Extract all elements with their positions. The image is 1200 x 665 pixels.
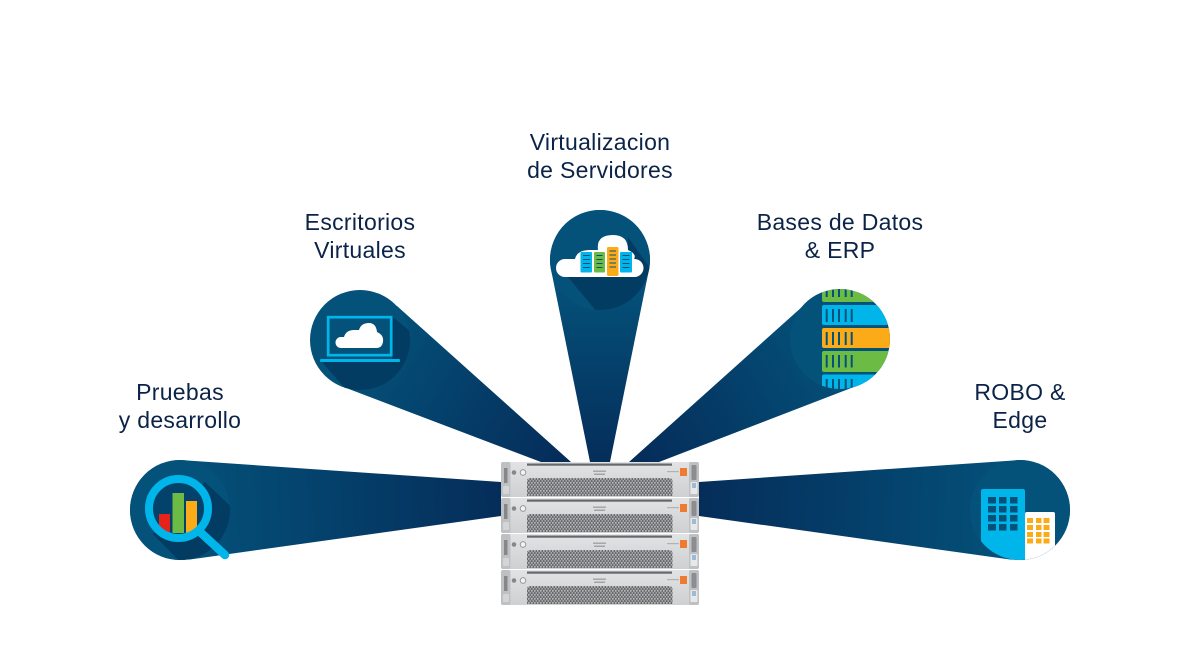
label: Bases de Datos y ERP: Bases de Datos <box>757 209 923 235</box>
beam: ROBO y Edge <box>699 460 1070 560</box>
beam: Bases de Datos y ERP <box>629 303 871 462</box>
label: Escritorios Virtuales: Escritorios <box>305 209 415 235</box>
label: Bases de Datos y ERP: & ERP <box>805 237 875 263</box>
server unit 3 <box>501 534 699 569</box>
label: ROBO y Edge: Edge <box>993 407 1047 433</box>
server unit 2 <box>501 498 699 533</box>
label: ROBO y Edge: ROBO & <box>974 379 1066 405</box>
label: Pruebas y desarrollo: y desarrollo <box>119 407 241 433</box>
icon: office buildings <box>981 460 1070 560</box>
label: Pruebas y desarrollo: Pruebas <box>136 379 224 405</box>
icon: magnifying glass with bar chart <box>130 460 230 560</box>
beam: Escritorios Virtuales <box>328 302 571 462</box>
icon: database server stack <box>800 289 890 389</box>
server unit 1 <box>501 462 699 497</box>
beam: Virtualizacion de Servidores <box>550 210 650 462</box>
beam: Pruebas y desarrollo <box>130 460 501 560</box>
label: Escritorios Virtuales: Virtuales <box>314 237 406 263</box>
icon: laptop with cloud <box>310 290 410 390</box>
label: Virtualizacion de Servidores: de Servidores <box>527 157 673 183</box>
icon: cloud with servers <box>550 210 650 310</box>
server unit 4 <box>501 570 699 605</box>
label: Virtualizacion de Servidores: Virtualizacion <box>530 129 670 155</box>
server stack <box>501 462 699 605</box>
